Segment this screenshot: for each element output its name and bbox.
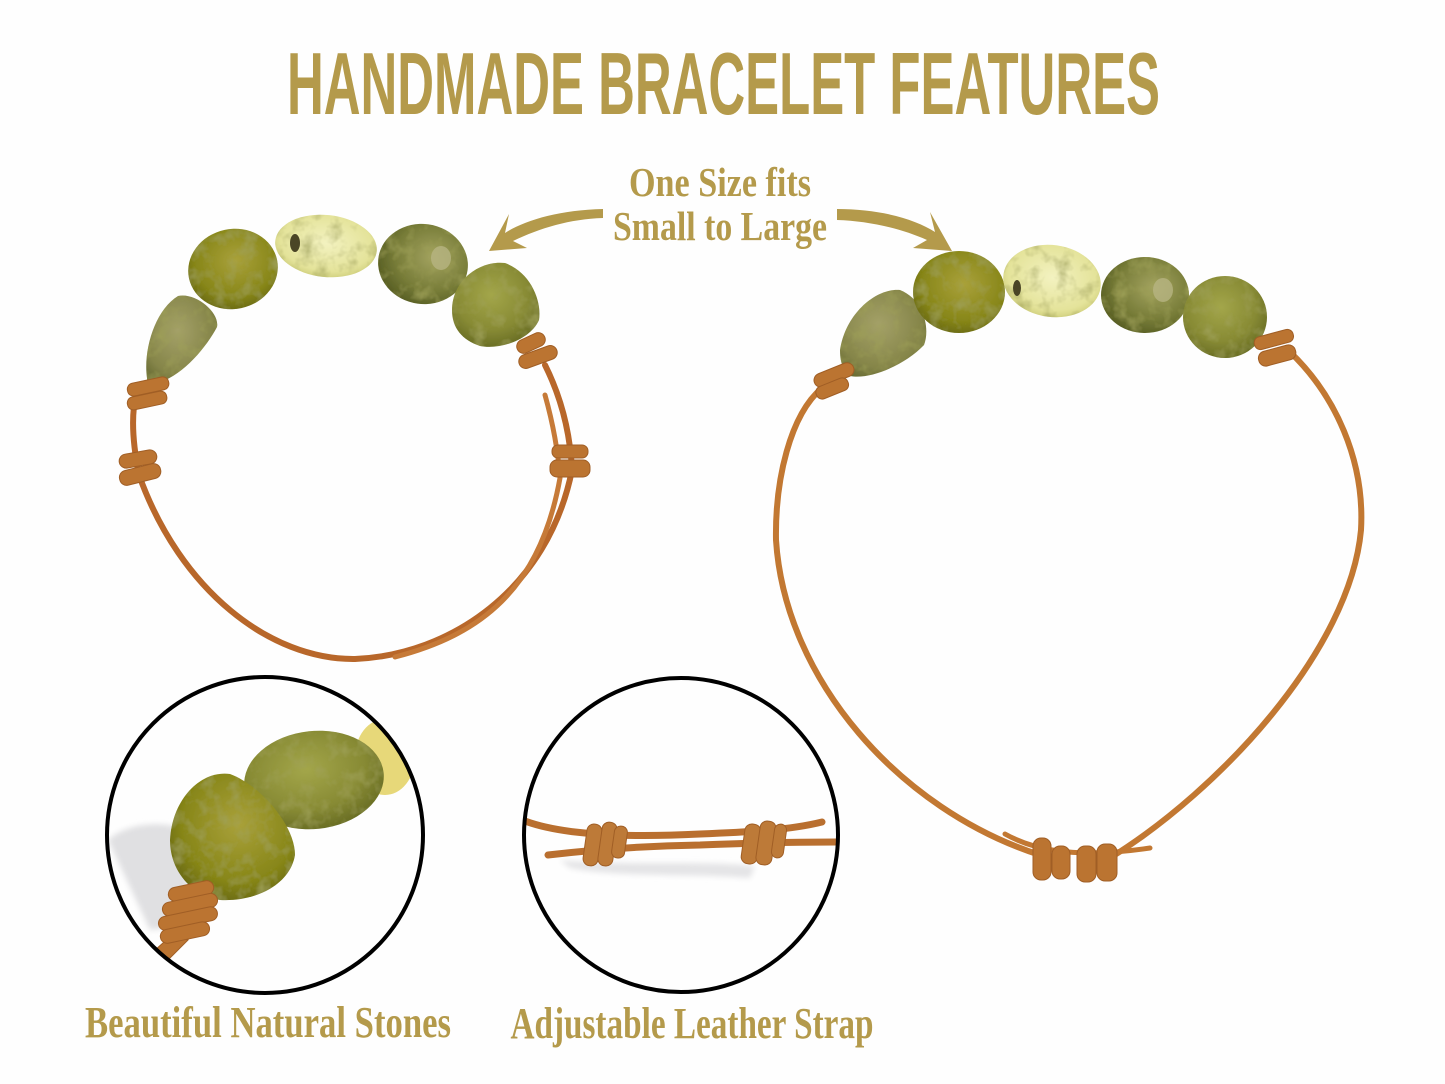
circle outline bbox=[524, 678, 838, 992]
close-up knot bbox=[155, 879, 219, 962]
large bracelet stones bbox=[840, 239, 1267, 377]
detail circle: leather strap bbox=[524, 678, 838, 992]
arrow: pointing to small bracelet bbox=[489, 209, 603, 251]
small bracelet leather cord bbox=[133, 365, 572, 659]
small bracelet stones bbox=[146, 210, 539, 384]
detail circle: natural stones bbox=[107, 677, 423, 993]
pale stone behind bbox=[358, 722, 410, 795]
large bracelet knots bbox=[812, 328, 1297, 882]
circle outline bbox=[107, 677, 423, 993]
strap shadow bbox=[560, 860, 755, 878]
caption: natural stones: Beautiful Natural Stones bbox=[85, 998, 451, 1047]
size callout text: One Size fits bbox=[629, 159, 811, 205]
strap knots bbox=[582, 820, 787, 867]
small bracelet bbox=[118, 210, 590, 659]
small bracelet knots bbox=[118, 330, 590, 487]
size callout text: Small to Large bbox=[613, 203, 827, 249]
stone details wrapper bbox=[146, 210, 539, 384]
close-up stones bbox=[170, 724, 389, 900]
large bracelet bbox=[776, 239, 1361, 882]
stone details wrapper bbox=[840, 239, 1267, 377]
caption: leather strap: Adjustable Leather Strap bbox=[510, 999, 874, 1048]
large bracelet leather cord bbox=[776, 352, 1361, 858]
stone shadow bbox=[108, 824, 190, 930]
arrow: pointing to large bracelet bbox=[837, 209, 952, 251]
strap cords bbox=[525, 821, 838, 855]
size callout text bbox=[613, 159, 827, 249]
